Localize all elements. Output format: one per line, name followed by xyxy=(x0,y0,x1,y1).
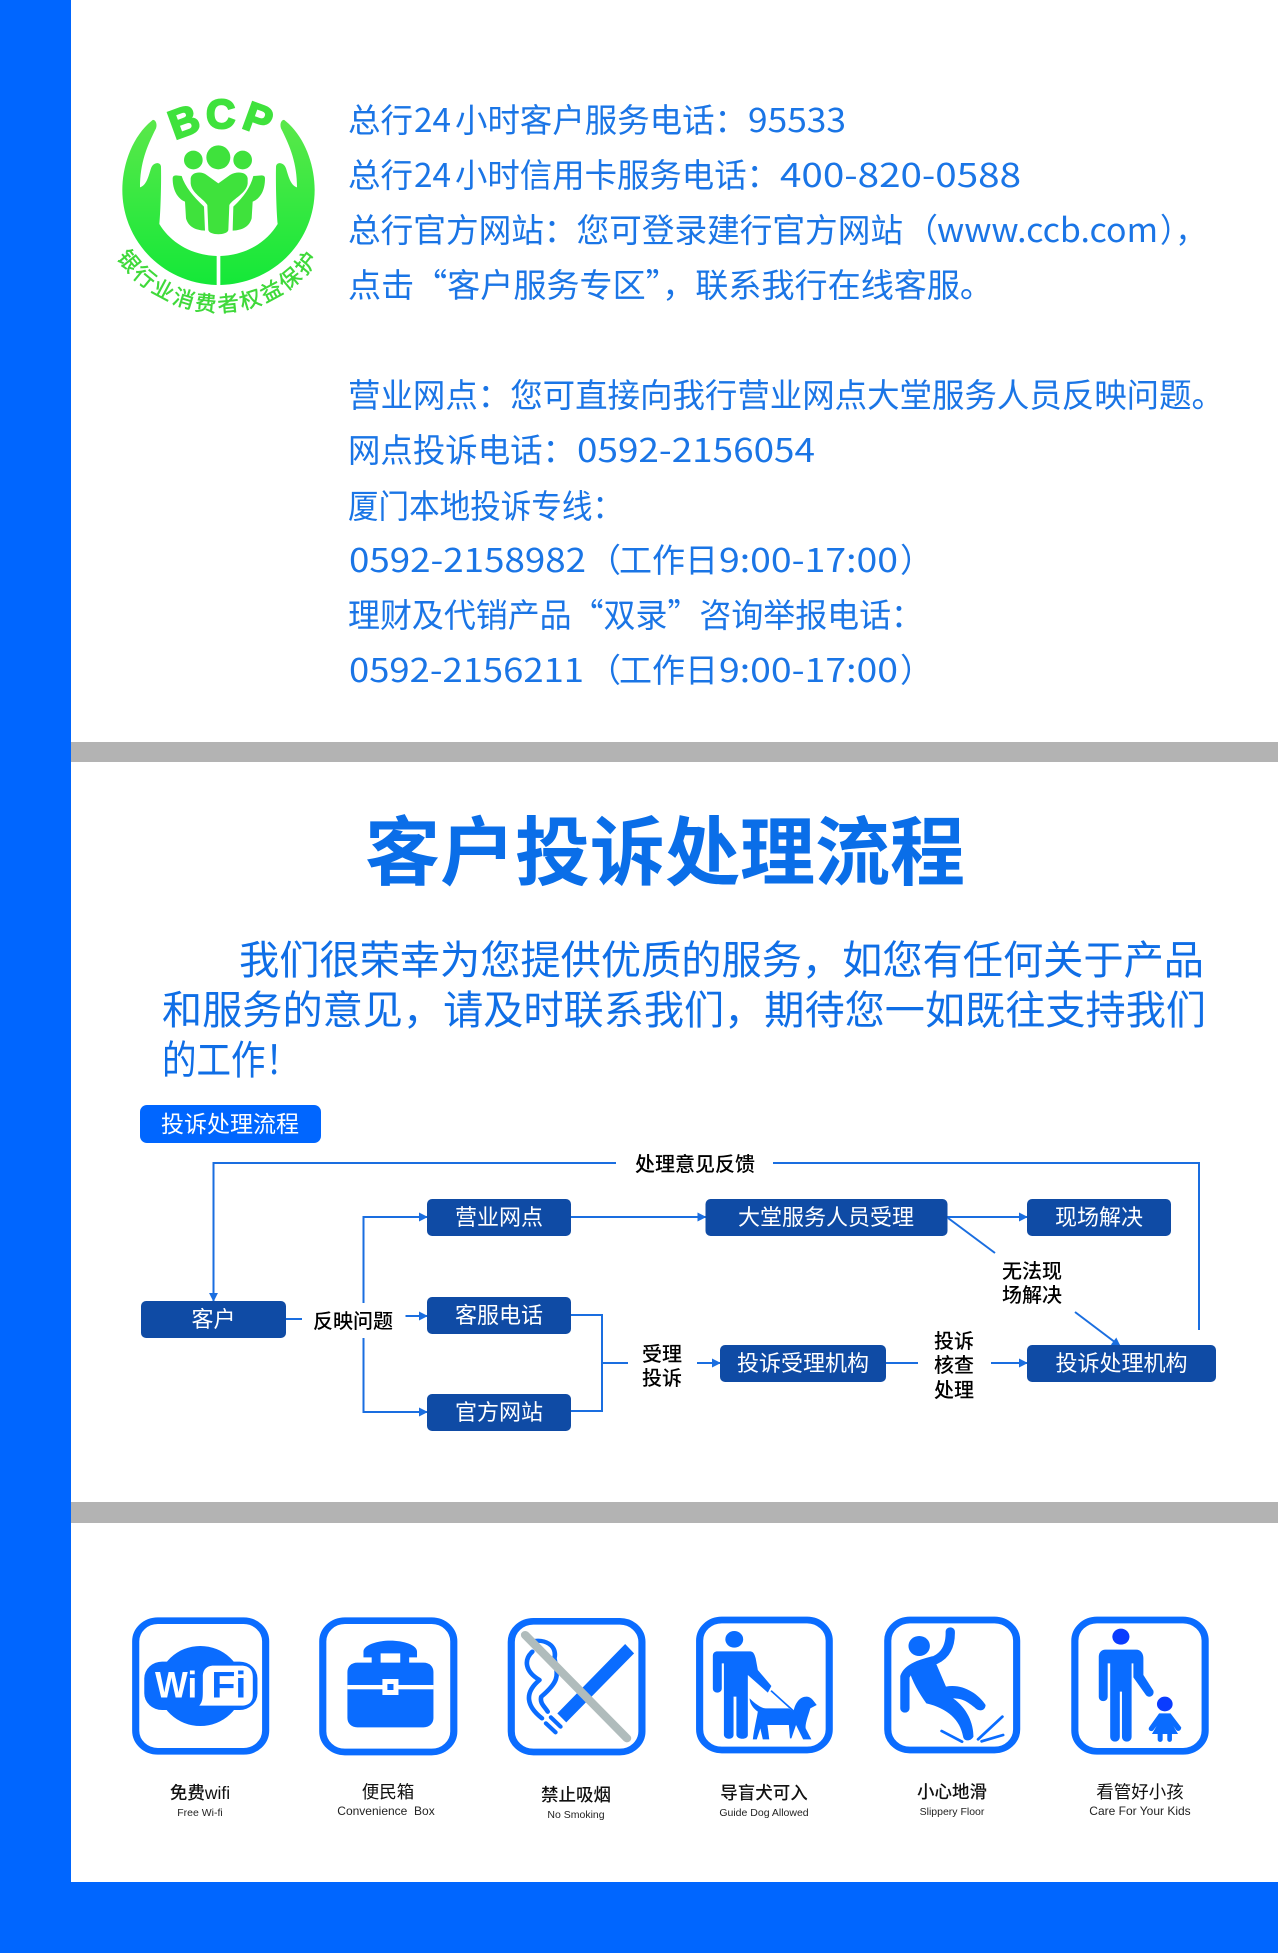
box: on-site resolution: 现场解决 xyxy=(1055,1205,1143,1230)
icon: BCP logo: P xyxy=(238,93,279,145)
text block: service contacts: （ xyxy=(905,204,938,252)
text block: service contacts xyxy=(348,94,1224,692)
caption: free wifi: 免费wifi xyxy=(170,1783,230,1803)
title: 客户投诉处理流程 xyxy=(365,811,965,895)
text block: service contacts: 工作日 xyxy=(619,534,718,582)
text block: service contacts: 小时客户服务电话： xyxy=(455,94,747,142)
caption: convenience box xyxy=(337,1782,435,1818)
text block: service contacts: 9:00-17:00 xyxy=(719,644,898,692)
label: feedback: 处理意见反馈 xyxy=(635,1153,755,1176)
icon: wifi: Fi xyxy=(211,1665,246,1706)
caption: slippery floor: Slippery Floor xyxy=(920,1806,985,1818)
caption: care for kids xyxy=(1089,1782,1191,1818)
icon: BCP logo: C xyxy=(206,91,235,137)
icon: BCP logo: 银行业消费者权益保护 xyxy=(117,248,314,314)
flow chart xyxy=(141,1153,1216,1431)
box: lobby staff: 大堂服务人员受理 xyxy=(738,1205,914,1230)
text block: service contacts: 网点投诉电话： xyxy=(348,424,575,472)
box: website xyxy=(427,1394,571,1431)
left blue bar xyxy=(0,0,71,1953)
box: complaint intake xyxy=(720,1345,886,1382)
connector lines xyxy=(214,1163,1199,1412)
text block: service contacts: 95533 xyxy=(748,94,846,142)
icon: no smoking xyxy=(511,1621,642,1752)
caption: free wifi: Free Wi-fi xyxy=(177,1807,223,1819)
text block: intro paragraph: 我们很荣幸为您提供优质的服务，如您有任何关于产品 xyxy=(239,939,1204,983)
label: report problem: 反映问题 xyxy=(313,1310,393,1333)
caption: guide dog allowed xyxy=(719,1783,809,1819)
label: cannot resolve xyxy=(1002,1260,1062,1307)
icon: wifi xyxy=(136,1621,266,1751)
box: customer xyxy=(141,1301,286,1338)
text block: service contacts: 营业网点：您可直接向我行营业网点大堂服务人员反映问题。 xyxy=(348,369,1224,417)
caption: no smoking xyxy=(541,1785,611,1821)
text block: service contacts: 总行官方网站：您可登录建行官方网站 xyxy=(348,204,903,252)
text block: service contacts: （ xyxy=(588,644,621,692)
box: branch: 营业网点 xyxy=(455,1205,543,1230)
text block: service contacts: 400-820-0588 xyxy=(780,149,1021,197)
label: verify and process: 投诉 xyxy=(934,1330,974,1353)
icon: BCP logo xyxy=(117,91,315,314)
text block: service contacts: 0592-2158982 xyxy=(349,534,586,582)
caption: slippery floor: 小心地滑 xyxy=(917,1782,987,1802)
label: cannot resolve: 场解决 xyxy=(1002,1284,1062,1307)
text block: service contacts: ） xyxy=(900,644,933,692)
box: phone: 客服电话 xyxy=(455,1303,543,1328)
caption: no smoking: No Smoking xyxy=(547,1809,605,1821)
text block: service contacts: www.ccb.com xyxy=(937,204,1158,252)
icon: slippery floor xyxy=(888,1620,1017,1750)
text block: service contacts: 厦门本地投诉专线： xyxy=(348,480,623,528)
text block: service contacts: 9:00-17:00 xyxy=(719,534,898,582)
box: website: 官方网站 xyxy=(455,1400,543,1425)
caption: slippery floor xyxy=(917,1782,987,1818)
label: verify and process: 核查 xyxy=(934,1354,974,1377)
icon: BCP logo: B xyxy=(162,95,206,148)
caption: guide dog allowed: Guide Dog Allowed xyxy=(719,1807,809,1819)
icon: wifi: Wi xyxy=(155,1665,197,1706)
text block: intro paragraph xyxy=(162,939,1206,1083)
box: on-site resolution xyxy=(1027,1199,1171,1236)
box: branch xyxy=(427,1199,571,1236)
box: customer: 客户 xyxy=(191,1307,236,1332)
caption: care for kids: 看管好小孩 xyxy=(1096,1782,1184,1802)
icon: watch your kids xyxy=(1075,1620,1205,1751)
caption: free wifi xyxy=(170,1783,230,1819)
text block: service contacts: ） xyxy=(900,534,933,582)
text block: service contacts: 点击“客户服务专区”，联系我行在线客服。 xyxy=(348,259,993,307)
text block: service contacts: 0592-2156211 xyxy=(349,644,584,692)
text block: service contacts: 小时信用卡服务电话： xyxy=(455,149,779,197)
label: verify and process xyxy=(934,1330,974,1402)
box: phone xyxy=(427,1297,571,1334)
caption: guide dog allowed: 导盲犬可入 xyxy=(720,1783,808,1803)
icon: guide dog xyxy=(700,1620,829,1750)
box: lobby staff xyxy=(706,1199,948,1236)
caption: convenience box: Convenience Box xyxy=(337,1804,435,1818)
box: complaint handling: 投诉处理机构 xyxy=(1055,1351,1188,1376)
text block: service contacts: 理财及代销产品“双录”咨询举报电话： xyxy=(348,589,923,637)
text block: service contacts: 工作日 xyxy=(619,644,718,692)
icon: convenience box xyxy=(323,1621,454,1752)
box: complaint handling xyxy=(1027,1345,1216,1382)
text block: service contacts: ）， xyxy=(1160,204,1206,252)
divider: upper gray band xyxy=(71,742,1278,762)
label: accept complaint: 投诉 xyxy=(642,1367,682,1390)
text block: service contacts: 总行 xyxy=(348,149,413,197)
label: accept complaint xyxy=(642,1343,682,1390)
tag: complaint process: 投诉处理流程 xyxy=(161,1111,299,1137)
text block: service contacts: （ xyxy=(588,534,621,582)
text block: service contacts: 24 xyxy=(414,149,451,197)
bottom blue bar xyxy=(0,1882,1278,1953)
label: accept complaint: 受理 xyxy=(642,1343,682,1366)
tag: complaint process xyxy=(140,1105,321,1143)
caption: care for kids: Care For Your Kids xyxy=(1089,1804,1191,1818)
divider: lower gray band xyxy=(71,1502,1278,1523)
text block: service contacts: 0592-2156054 xyxy=(577,424,815,472)
text block: service contacts: 总行 xyxy=(348,94,413,142)
label: verify and process: 处理 xyxy=(934,1379,974,1402)
box: complaint intake: 投诉受理机构 xyxy=(737,1351,869,1376)
caption: convenience box: 便民箱 xyxy=(362,1782,414,1802)
text block: intro paragraph: 和服务的意见，请及时联系我们，期待您一如既往支持我们 xyxy=(162,989,1206,1033)
text block: service contacts: 24 xyxy=(414,94,451,142)
text block: intro paragraph: 的工作！ xyxy=(162,1039,300,1083)
caption: no smoking: 禁止吸烟 xyxy=(541,1785,611,1805)
label: cannot resolve: 无法现 xyxy=(1002,1260,1062,1283)
